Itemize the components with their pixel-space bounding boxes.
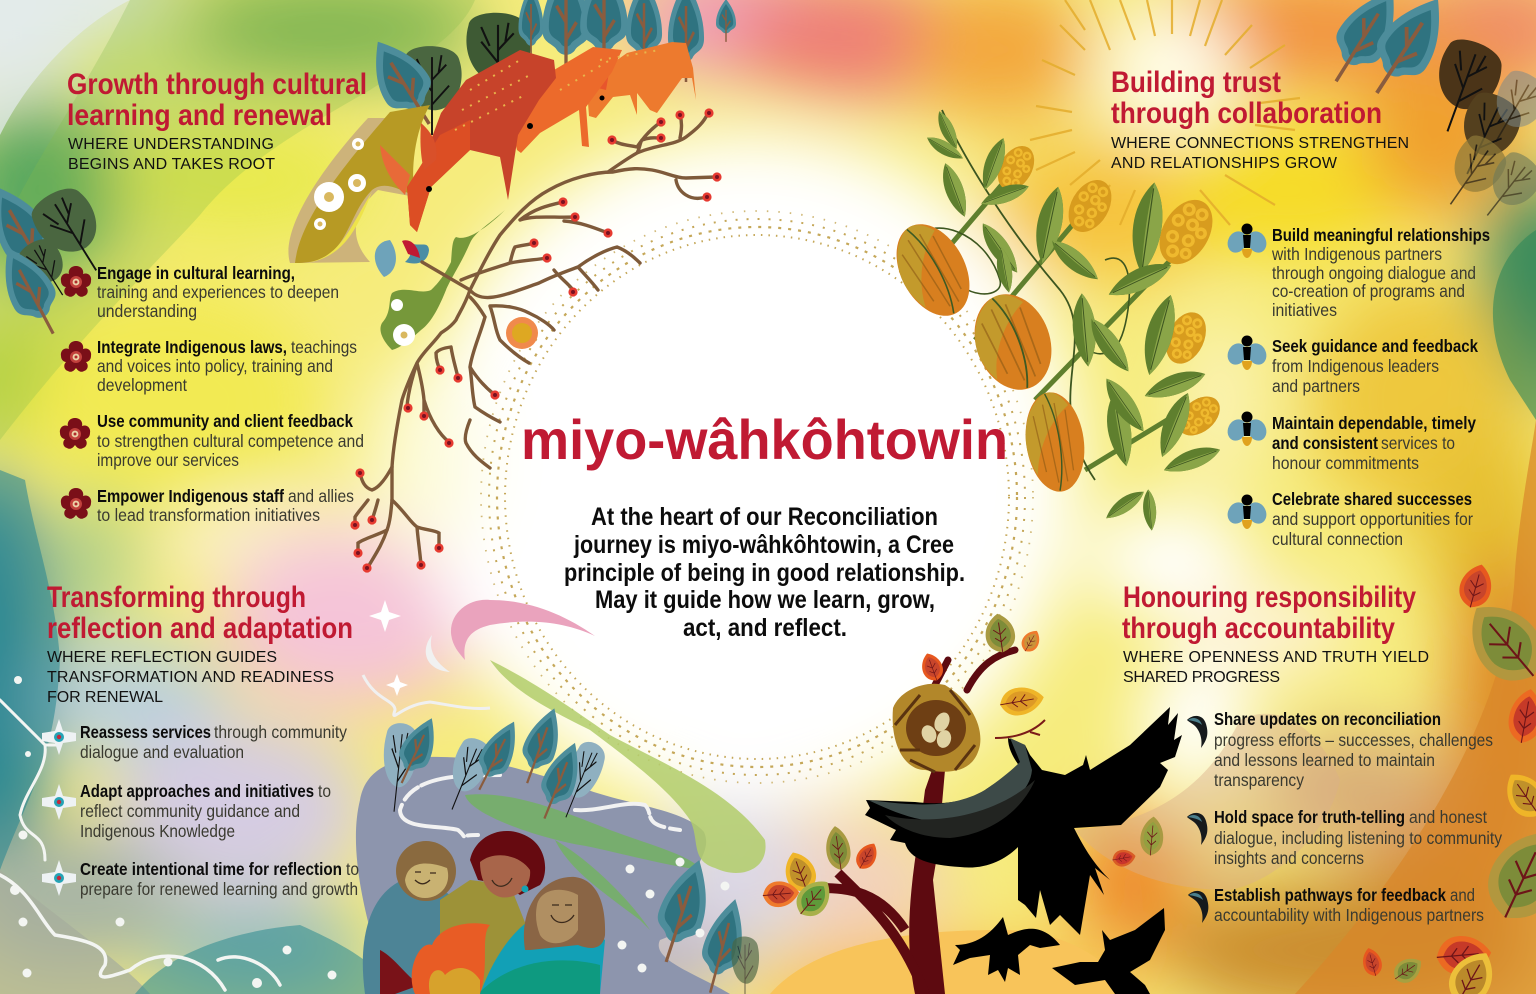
text: seek guidance and feedback bbox=[1272, 336, 1478, 396]
heading: honouring bbox=[1122, 581, 1416, 645]
text: reassess services: dialogue and evaluation bbox=[80, 742, 244, 762]
icon: flower bbox=[61, 488, 91, 519]
illustration: small black birds bbox=[953, 908, 1165, 994]
text: adapt approaches: Indigenous Knowledge bbox=[80, 821, 235, 841]
subheading: transforming: FOR RENEWAL bbox=[47, 689, 163, 706]
panel: transforming through reflection bbox=[42, 581, 359, 899]
text: reassess services: Reassess services bbox=[80, 722, 211, 742]
text: celebrate shared successes: and support opportunities for bbox=[1272, 509, 1473, 529]
text: celebrate shared successes: Celebrate shared successes bbox=[1272, 489, 1472, 509]
icon: feather bbox=[1187, 813, 1207, 845]
icon: feather bbox=[1187, 716, 1207, 748]
illustration: lake trees bbox=[378, 703, 759, 994]
text: adapt approaches bbox=[80, 781, 331, 841]
text: share updates: Share updates on reconciliation bbox=[1214, 709, 1441, 729]
text: use community and client feedback bbox=[97, 411, 364, 470]
text: use community and client feedback: to strengthen cultural competence and bbox=[97, 431, 364, 451]
panel: growth through cultural learning bbox=[60, 68, 367, 525]
subheading: honouring: SHARED PROGRESS bbox=[1123, 669, 1280, 686]
text: use community and client feedback: improve our services bbox=[97, 450, 239, 470]
heading: transforming: reflection and adaptation bbox=[47, 612, 353, 645]
dotted ring bbox=[481, 211, 1033, 783]
text: maintain dependable services: and consistent bbox=[1272, 433, 1378, 453]
text: engage in cultural learning: understanding bbox=[97, 301, 197, 321]
illustration: hillside with flowers bbox=[288, 105, 430, 264]
text: hold space: Hold space for truth-telling bbox=[1214, 807, 1405, 827]
text: hold space: insights and concerns bbox=[1214, 848, 1364, 868]
heading: transforming: Transforming through bbox=[47, 581, 306, 614]
text: build meaningful relationships: co-creation of programs and bbox=[1272, 281, 1465, 301]
icon: flower bbox=[60, 418, 90, 449]
text: celebrate shared successes: cultural connection bbox=[1272, 529, 1403, 549]
subheading: transforming bbox=[47, 649, 334, 706]
illustration: three people around a fire bbox=[363, 831, 605, 994]
icon: bee bbox=[1224, 224, 1270, 258]
text: establish pathways: and bbox=[1450, 885, 1475, 905]
text: maintain dependable services: honour commitments bbox=[1272, 453, 1419, 473]
text: use community and client feedback: Use community and client feedback bbox=[97, 411, 353, 431]
text: integrate indigenous laws: teachings bbox=[291, 337, 357, 357]
text: adapt approaches: reflect community guidance and bbox=[80, 801, 300, 821]
text: seek guidance and feedback: and partners bbox=[1272, 376, 1360, 396]
central statement bbox=[564, 503, 965, 642]
central title: miyo-wâhkôhtowin bbox=[521, 408, 1008, 471]
heading: building trust bbox=[1111, 66, 1382, 130]
icon: flower bbox=[61, 341, 91, 372]
subheading: building trust: WHERE CONNECTIONS STRENGTHEN bbox=[1111, 135, 1409, 152]
text: engage in cultural learning: training and experiences to deepen bbox=[97, 282, 339, 302]
subheading: honouring: WHERE OPENNESS AND TRUTH YIELD bbox=[1123, 649, 1429, 666]
heading: honouring: Honouring responsibility bbox=[1123, 581, 1416, 614]
illustration: three deer bbox=[380, 42, 696, 232]
text: integrate indigenous laws bbox=[97, 337, 357, 395]
text: share updates bbox=[1214, 709, 1493, 790]
text: empower indigenous staff: and allies bbox=[288, 486, 354, 506]
sun rays bbox=[1030, 0, 1300, 225]
icon: feather bbox=[1188, 891, 1208, 923]
illustration: top right trees bbox=[1315, 0, 1536, 230]
text: reassess services bbox=[80, 722, 347, 762]
text: maintain dependable services bbox=[1272, 413, 1476, 473]
illustration: pink swoosh and moon bbox=[363, 600, 595, 716]
text: maintain dependable services: services to bbox=[1381, 433, 1455, 453]
text: integrate indigenous laws: Integrate Indigenous laws, bbox=[97, 337, 287, 357]
subheading: transforming: TRANSFORMATION AND READINESS bbox=[47, 669, 334, 686]
icon: star bbox=[42, 860, 76, 896]
subheading: building trust: AND RELATIONSHIPS GROW bbox=[1111, 155, 1338, 172]
icon: star bbox=[42, 784, 76, 820]
text: seek guidance and feedback: from Indigenous leaders bbox=[1272, 356, 1439, 376]
illustration: large black bird bbox=[865, 707, 1182, 935]
text: integrate indigenous laws: development bbox=[97, 375, 187, 395]
text: create intentional time: prepare for renewed learning and growth bbox=[80, 879, 358, 899]
icon: flower bbox=[61, 266, 91, 297]
icon: bee bbox=[1224, 336, 1270, 370]
text: hold space bbox=[1214, 807, 1502, 868]
heading: building trust: through collaboration bbox=[1111, 97, 1382, 130]
text: integrate indigenous laws: and voices into policy, training and bbox=[97, 356, 333, 376]
text: build meaningful relationships bbox=[1271, 225, 1490, 320]
text: establish pathways: accountability with Indigenous partners bbox=[1214, 905, 1484, 925]
central statement: May it guide how we learn, grow, bbox=[595, 586, 935, 614]
text: share updates: progress efforts – successes, challenges bbox=[1214, 730, 1493, 750]
text: build meaningful relationships: through ongoing dialogue and bbox=[1272, 263, 1476, 283]
text: build meaningful relationships: Build meaningful relationships bbox=[1272, 225, 1490, 245]
heading: building trust: Building trust bbox=[1111, 66, 1281, 99]
text: adapt approaches: Adapt approaches and initiatives bbox=[80, 781, 314, 801]
text: create intentional time bbox=[80, 859, 359, 899]
central statement: At the heart of our Reconciliation bbox=[591, 503, 938, 531]
central statement: journey is miyo-wâhkôhtowin, a Cree bbox=[573, 531, 954, 559]
heading: transforming bbox=[47, 581, 353, 645]
text: hold space: dialogue, including listening to community bbox=[1214, 828, 1502, 848]
text: maintain dependable services: Maintain dependable, timely bbox=[1272, 413, 1476, 433]
subheading: growth: BEGINS AND TAKES ROOT bbox=[68, 156, 275, 173]
icon: bee bbox=[1224, 494, 1270, 529]
central statement: act, and reflect. bbox=[683, 614, 847, 642]
subheading: honouring bbox=[1123, 649, 1429, 686]
text: engage in cultural learning bbox=[97, 263, 339, 321]
illustration: trees top left bbox=[357, 0, 736, 137]
icon: bee bbox=[1224, 412, 1270, 446]
heading: growth: learning and renewal bbox=[67, 99, 332, 132]
text: establish pathways bbox=[1214, 885, 1484, 925]
text: build meaningful relationships: initiatives bbox=[1272, 300, 1337, 320]
text: adapt approaches: to bbox=[318, 781, 331, 801]
illustration: white trails and snow dots bbox=[0, 676, 730, 990]
text: reassess services: through community bbox=[214, 722, 347, 742]
heading: growth: Growth through cultural bbox=[67, 68, 367, 101]
text: share updates: and lessons learned to maintain bbox=[1214, 750, 1435, 770]
text: establish pathways: Establish pathways for feedback bbox=[1214, 885, 1446, 905]
text: empower indigenous staff: to lead transformation initiatives bbox=[97, 505, 320, 525]
text: engage in cultural learning: Engage in cultural learning, bbox=[97, 263, 295, 283]
illustration: falling leaves right side bbox=[1111, 561, 1536, 994]
subheading: growth: WHERE UNDERSTANDING bbox=[68, 136, 274, 153]
text: empower indigenous staff bbox=[97, 486, 354, 525]
subheading: transforming: WHERE REFLECTION GUIDES bbox=[47, 649, 277, 666]
text: create intentional time: to bbox=[346, 859, 359, 879]
text: build meaningful relationships: with Indigenous partners bbox=[1271, 244, 1442, 264]
text: share updates: transparency bbox=[1214, 770, 1304, 790]
illustration: bird's nest tree bbox=[762, 612, 1046, 994]
text: celebrate shared successes bbox=[1272, 489, 1473, 549]
text: create intentional time: Create intentional time for reflection bbox=[80, 859, 342, 879]
text: seek guidance and feedback: Seek guidance and feedback bbox=[1272, 336, 1478, 356]
heading: honouring: through accountability bbox=[1122, 612, 1395, 645]
illustration: lake bbox=[356, 660, 766, 994]
text: hold space: and honest bbox=[1409, 807, 1487, 827]
illustration: branching tree with red berries bbox=[350, 108, 722, 573]
heading: growth bbox=[67, 68, 367, 132]
illustration: left edge trees bbox=[0, 174, 121, 344]
illustration: corn and squash vines bbox=[882, 109, 1227, 531]
icon: star bbox=[42, 719, 76, 755]
subheading: building trust bbox=[1111, 135, 1409, 172]
subheading: growth bbox=[68, 136, 275, 173]
illustration: butterfly and plant bbox=[375, 210, 505, 350]
central statement: principle of being in good relationship. bbox=[564, 559, 965, 587]
panel: honouring responsibility through accountability bbox=[1122, 581, 1502, 925]
panel: building trust through collaboration bbox=[1111, 66, 1490, 549]
text: empower indigenous staff: Empower Indigenous staff bbox=[97, 486, 284, 506]
